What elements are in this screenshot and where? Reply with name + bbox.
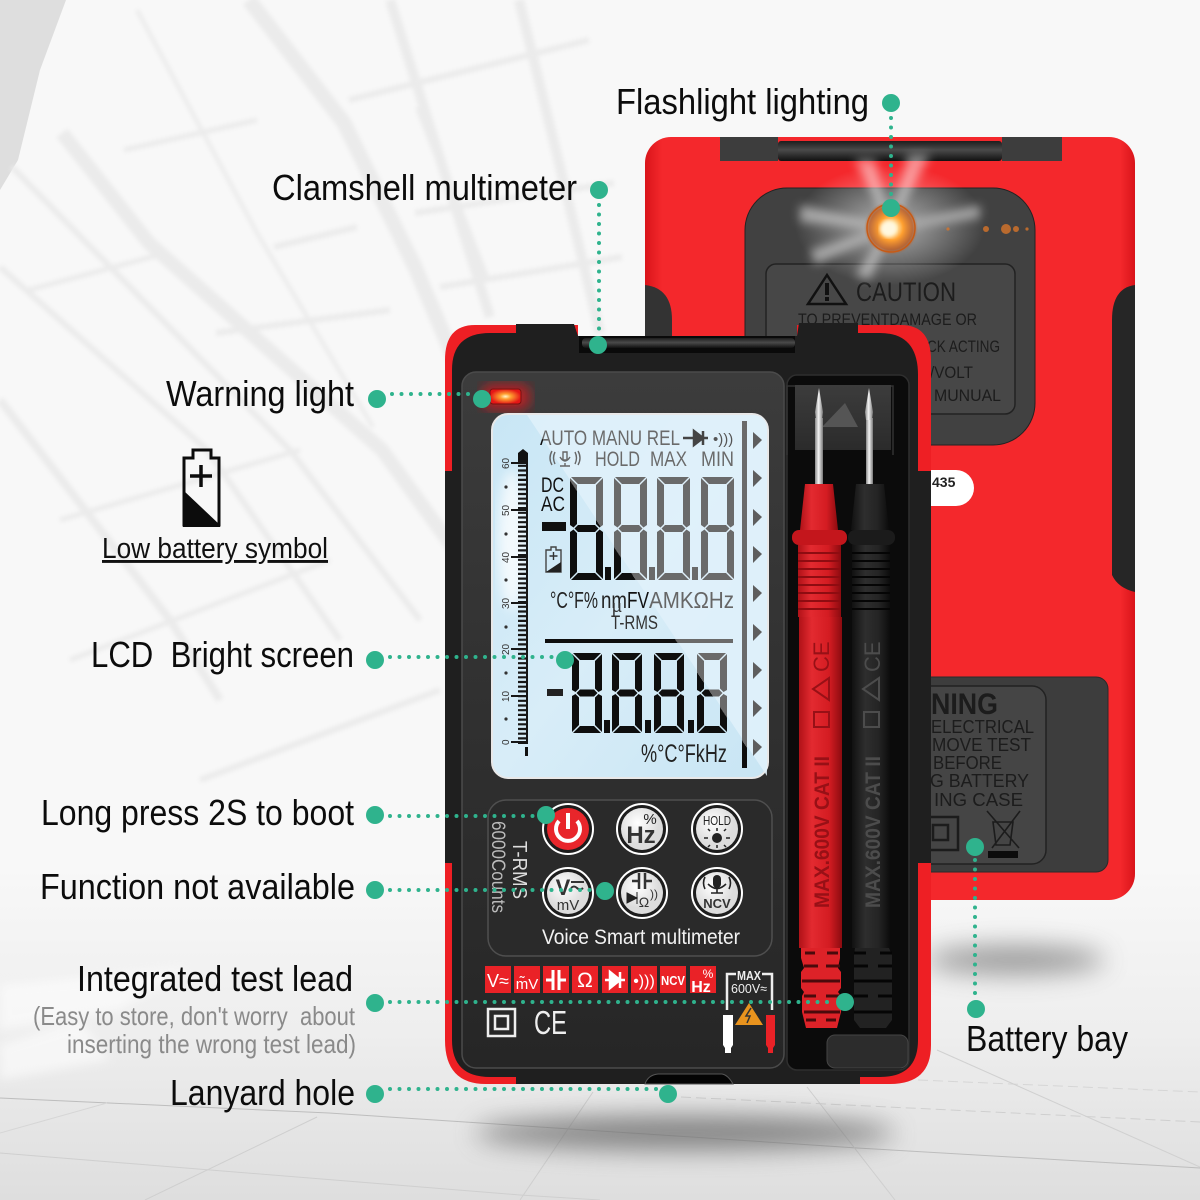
button: voice and NCV: NCV xyxy=(703,896,731,911)
warning light xyxy=(482,384,530,410)
function icon row: •))) xyxy=(633,973,655,990)
caution label: CK ACTING xyxy=(927,337,1000,356)
label: flashlight lighting: Flashlight lighting xyxy=(616,81,869,122)
label: LCD bright screen: LCD Bright screen xyxy=(91,634,354,675)
model pill xyxy=(900,470,974,506)
connector: warning light xyxy=(368,390,491,408)
battery bay cover: ING CASE xyxy=(934,790,1023,810)
connector: function button xyxy=(366,881,614,900)
connector: battery bay xyxy=(966,838,985,1018)
side grips xyxy=(645,285,1135,592)
safety marks xyxy=(488,1004,567,1041)
note: test lead explanation: (Easy to store, don't worry about xyxy=(33,1001,356,1031)
function icon row: NCV xyxy=(661,973,685,988)
bar graph scale: 10 xyxy=(501,690,512,702)
clamshell hinge xyxy=(579,336,795,353)
caution label: /VOLT xyxy=(930,363,973,382)
battery bay cover: NING xyxy=(931,688,998,721)
bar graph scale: 0 xyxy=(501,739,512,745)
button: capacitance, diode, resistance: Ω xyxy=(639,894,649,910)
lower seven-segment digits xyxy=(572,653,727,733)
battery bay cover: MOVE TEST xyxy=(932,735,1031,755)
connector: lanyard hole xyxy=(366,1085,677,1103)
note: test lead explanation xyxy=(33,1001,356,1059)
red shell xyxy=(445,325,931,1084)
max voltage input diagram: MAX xyxy=(737,968,761,983)
LCD annunciators: %°C°FkHz xyxy=(641,740,727,768)
floor shadows xyxy=(475,946,1105,1150)
button: power xyxy=(543,804,593,854)
LCD annunciators: MAX xyxy=(650,448,687,471)
icon: low battery xyxy=(183,450,220,527)
LCD annunciators: °C°F% xyxy=(550,587,598,613)
front of multimeter xyxy=(445,323,931,1084)
button: Hz percent: % xyxy=(643,811,657,828)
upper seven-segment digits xyxy=(570,477,734,580)
max voltage input diagram xyxy=(723,968,775,1053)
battery bay cover: ELECTRICAL xyxy=(931,717,1034,737)
safety marks: CE xyxy=(534,1004,567,1041)
button: hold and backlight xyxy=(692,804,742,854)
LCD screen xyxy=(492,414,768,778)
LCD annunciators: AMKΩHz xyxy=(649,587,734,613)
caution label xyxy=(766,264,1015,414)
LCD annunciators: FV xyxy=(627,587,649,613)
label: low battery symbol: Low battery symbol xyxy=(102,533,328,565)
red test lead xyxy=(792,388,847,1028)
lanyard hole xyxy=(645,1074,733,1084)
caution label: TO PREVENTDAMAGE OR xyxy=(798,310,977,329)
keypad panel: Voice Smart multimeter xyxy=(542,926,740,949)
flashlight plate xyxy=(745,188,1035,445)
function icon row: Hz xyxy=(691,979,711,996)
connector: test lead xyxy=(366,993,854,1012)
bar graph scale: 50 xyxy=(501,504,512,516)
battery bay cover: G BATTERY xyxy=(930,771,1029,791)
function icon row: V≈ xyxy=(487,971,509,991)
main face panel xyxy=(462,372,784,1068)
black test lead xyxy=(848,388,895,1028)
connector: power button xyxy=(366,806,555,824)
model pill: 435 xyxy=(932,474,956,490)
label: clamshell multimeter: Clamshell multimeter xyxy=(272,167,577,208)
LCD annunciators: AC xyxy=(541,493,565,516)
connector: clamshell xyxy=(589,181,608,354)
hinge xyxy=(720,137,1062,161)
button: Hz percent: Hz xyxy=(626,822,656,849)
battery bay cover xyxy=(900,677,1108,872)
LCD annunciators: T-RMS xyxy=(611,613,658,634)
function icon row xyxy=(485,966,716,996)
label: long press: Long press 2S to boot xyxy=(41,792,354,833)
button: capacitance, diode, resistance xyxy=(617,868,667,918)
right bar and arrows xyxy=(742,421,762,768)
label: lanyard hole: Lanyard hole xyxy=(170,1072,355,1113)
black shell xyxy=(445,323,931,1084)
keypad panel: 6000Counts xyxy=(487,821,508,913)
bar graph scale: 60 xyxy=(501,457,512,469)
back of multimeter: red shell xyxy=(645,137,1135,900)
flashlight glow xyxy=(795,155,1029,285)
label: integrated test lead: Integrated test lead xyxy=(77,958,353,999)
LCD annunciators: DC xyxy=(541,474,564,497)
button: capacitance, diode, resistance: )) xyxy=(650,887,658,901)
function icon row: % xyxy=(703,967,714,981)
button: voltage: V xyxy=(556,875,571,900)
keypad panel: T-RMS xyxy=(508,841,530,899)
label: function not available: Function not available xyxy=(40,866,355,907)
connector: LCD xyxy=(366,651,574,669)
caution label: CAUTION xyxy=(856,277,956,307)
bar graph scale: 30 xyxy=(501,597,512,609)
label: warning light: Warning light xyxy=(166,373,354,414)
LCD annunciators: AUTO MANU REL xyxy=(540,427,680,450)
LCD annunciators: HOLD xyxy=(595,448,640,471)
connector: flashlight xyxy=(882,94,900,217)
button: voltage: mV xyxy=(557,897,579,914)
button: Hz percent xyxy=(617,804,667,854)
button: hold and backlight: HOLD xyxy=(703,813,731,828)
LCD annunciators: MIN xyxy=(701,448,734,471)
function icon row: Ω xyxy=(577,969,593,992)
LCD annunciators: nm xyxy=(601,587,627,613)
note: test lead explanation: inserting the wrong test lead) xyxy=(67,1029,356,1059)
bar graph scale: 20 xyxy=(501,643,512,655)
max voltage input diagram: 600V≈ xyxy=(731,981,767,996)
LCD annunciators: •))) xyxy=(713,431,733,448)
caution label: MUNUAL xyxy=(934,386,1001,405)
bar graph scale: 40 xyxy=(501,551,512,563)
red test lead: CE xyxy=(809,641,834,672)
bar graph scale xyxy=(501,449,528,756)
red test lead: MAX.600V CAT II xyxy=(811,756,834,908)
LCD annunciators xyxy=(540,427,734,768)
LCD annunciators: µ xyxy=(612,597,622,616)
keypad panel xyxy=(487,800,772,956)
black test lead: MAX.600V CAT II xyxy=(862,756,885,908)
test lead compartment xyxy=(787,375,909,1070)
button: voice and NCV xyxy=(692,868,742,918)
label: battery bay: Battery bay xyxy=(966,1018,1128,1059)
button: voltage xyxy=(543,868,593,918)
function icon row: m̃V xyxy=(516,976,538,993)
black test lead: CE xyxy=(860,641,885,672)
battery bay cover: BEFORE xyxy=(933,753,1002,773)
